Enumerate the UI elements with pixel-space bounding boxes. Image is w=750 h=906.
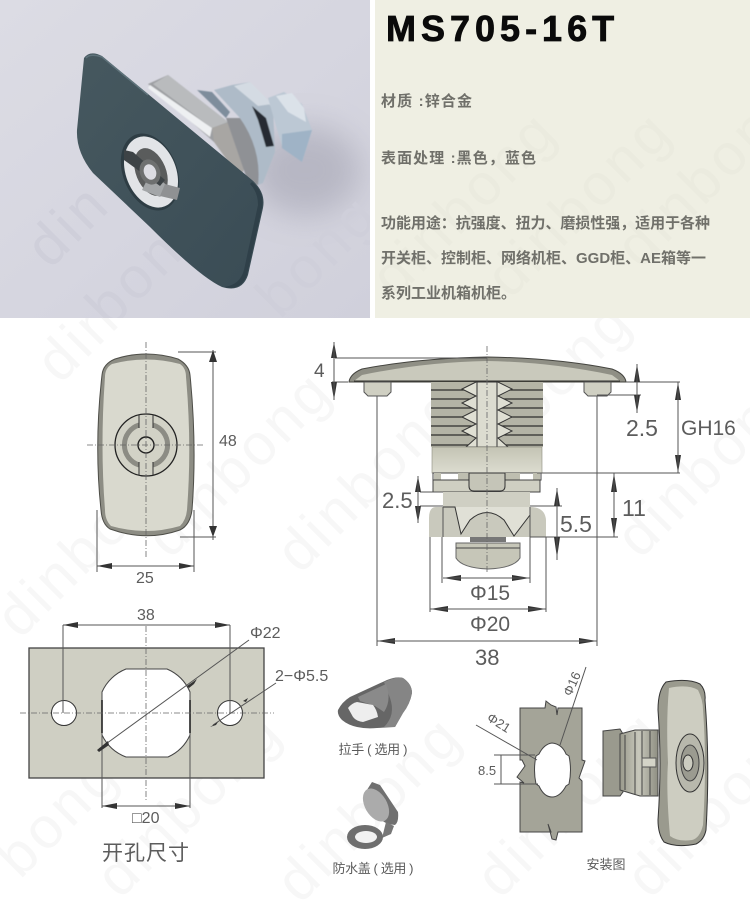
icon: key cylinder	[115, 414, 177, 476]
text: material: 材质 :锌合金	[381, 92, 472, 110]
panel: product photo	[0, 0, 370, 318]
icon: lock assembly	[603, 680, 708, 846]
dimension: Φ16: Φ16	[560, 669, 584, 698]
dimension labels: 2.5	[626, 415, 658, 441]
threaded body	[431, 382, 543, 447]
watermark: lower section: dinbong	[263, 372, 475, 584]
dimension: Φ22: Φ22	[250, 625, 281, 642]
mounting plate	[517, 701, 585, 840]
text: function and use: 功能用途：抗强度、扭力、磨损性强，适用于各种	[381, 214, 710, 232]
title: MS705-16T	[386, 8, 619, 49]
collar	[432, 447, 542, 473]
watermark: lower section: dinbong	[83, 697, 295, 906]
drawing: cut-out dimensions	[20, 607, 328, 865]
dimension labels: 5.5	[560, 511, 592, 537]
plate and neck	[433, 480, 540, 492]
screw	[470, 537, 506, 542]
dimension: 8.5: 8.5	[478, 763, 496, 778]
dimension labels: 4	[314, 361, 325, 382]
watermark: lower section	[54, 354, 708, 841]
watermark: lower section: dinbong	[463, 697, 675, 906]
drawing: side view	[314, 342, 736, 670]
watermark: lower section: dinbong	[133, 357, 345, 569]
dimension labels	[314, 361, 736, 670]
panel: product photo: din	[13, 170, 122, 279]
drawing: installation diagram	[476, 667, 708, 846]
caption: handle: 拉手 ( 选用 )	[338, 742, 408, 757]
caption: cover: 防水盖 ( 选用 )	[332, 861, 414, 876]
dimension labels: 11	[622, 495, 646, 521]
dimension labels: GH16	[681, 417, 736, 440]
watermark group	[358, 67, 750, 309]
icon: optional handle	[338, 677, 412, 728]
icon: lock body metal	[148, 75, 312, 185]
dimension: 2-Φ5.5: 2−Φ5.5	[275, 668, 328, 685]
icon: optional waterproof cover	[347, 782, 398, 849]
dimension labels: 38	[475, 645, 499, 670]
dimension labels: Φ20	[470, 613, 510, 636]
studs	[364, 382, 611, 396]
dimension: 25: 25	[136, 570, 154, 587]
dimension: 38: 38	[137, 607, 155, 624]
text: surface treatment: 表面处理 :黑色，蓝色	[381, 149, 536, 167]
cap	[349, 357, 626, 382]
watermark group: dinbong	[358, 97, 570, 309]
dimension: Φ21: Φ21	[484, 710, 513, 736]
dimension: 48: 48	[219, 433, 237, 450]
caption: installation: 安装图	[586, 857, 626, 872]
text: function and use: 系列工业机箱机柜。	[381, 284, 516, 302]
text: function and use: 开关柜、控制柜、网络机柜、GGD柜、AE箱等一	[381, 249, 706, 267]
watermark: lower section: dinbong	[433, 287, 645, 499]
watermark group: dinbong	[473, 97, 685, 309]
panel: product specification	[358, 0, 750, 318]
panel: product photo: bong	[243, 181, 392, 329]
icon: lock keyhole	[120, 134, 180, 210]
text: function and use	[381, 214, 710, 302]
dimension: square 20: □20	[132, 810, 160, 827]
caption: cut-out size: 开孔尺寸	[102, 842, 190, 865]
dimension labels: 2.5	[382, 488, 413, 513]
washer	[433, 473, 541, 480]
icon: lock face plate	[77, 53, 264, 288]
drawing: front view	[87, 342, 237, 587]
cam	[429, 507, 546, 537]
watermark: lower section: din	[23, 285, 132, 394]
dimension labels: Φ15	[470, 582, 510, 605]
panel: product photo: bong	[73, 191, 222, 339]
